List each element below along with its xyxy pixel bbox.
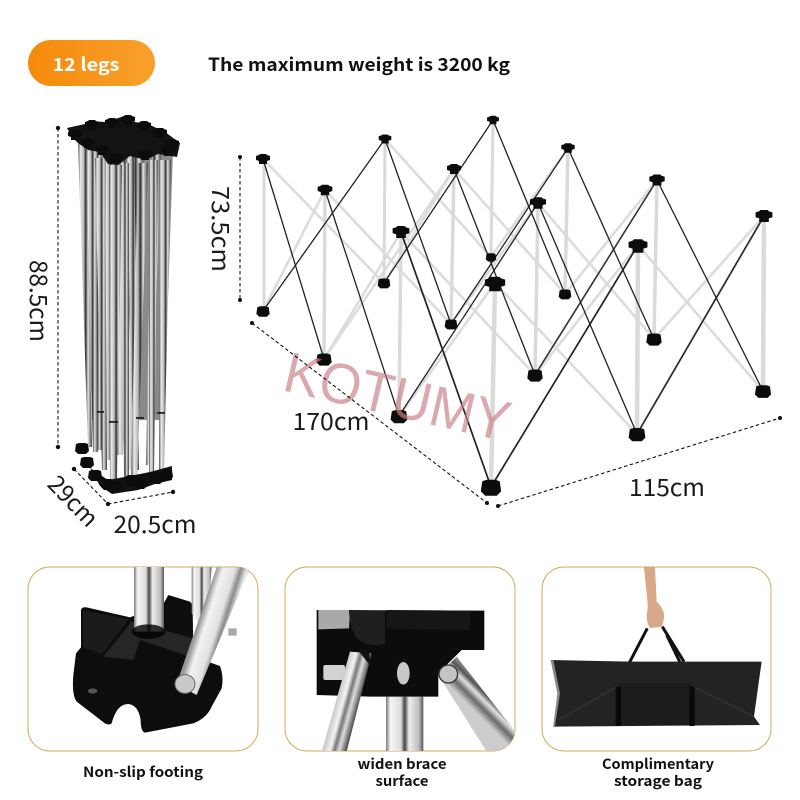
- label: widen brace surface: surface: [376, 771, 428, 791]
- dimension: 88.5cm: [23, 126, 60, 449]
- dimension: 20.5cm: 20.5cm: [114, 505, 196, 540]
- label: complimentary storage bag: [602, 754, 714, 791]
- photo: storage bag held by hand: [551, 567, 762, 727]
- label: complimentary storage bag: storage bag: [614, 771, 703, 791]
- label: Non-slip footing: Non-slip footing: [83, 762, 204, 782]
- vertical legs: [264, 120, 764, 487]
- dimension: 29cm: 29cm: [41, 466, 108, 533]
- dimension: 115cm: 115cm: [629, 468, 705, 503]
- label: widen brace surface: [358, 754, 446, 791]
- dimension: 115cm: [496, 416, 782, 508]
- dimension: 73.5cm: [205, 155, 242, 302]
- panel: widen brace surface: [285, 567, 517, 752]
- badge: 12 legs: 12 legs: [52, 51, 120, 77]
- dimension: 88.5cm: 88.5cm: [23, 260, 58, 342]
- photo: brace head: [317, 610, 517, 752]
- panel: non-slip footing: [28, 567, 258, 751]
- dimension: 73.5cm: 73.5cm: [205, 186, 240, 272]
- dimension: 170cm: [250, 321, 489, 505]
- photo: rubber foot: [73, 567, 250, 733]
- label: complimentary storage bag: Complimentary: [602, 754, 714, 774]
- heading: maximum weight: The maximum weight is 3200 kg: [208, 51, 510, 77]
- label: widen brace surface: widen brace: [358, 754, 446, 774]
- leg caps and feet: [256, 116, 772, 496]
- dimension: 20.5cm: [108, 490, 196, 540]
- panel: complimentary storage bag: [542, 567, 771, 751]
- dimension: 170cm: 170cm: [292, 402, 370, 437]
- badge: 12 legs: [28, 40, 155, 86]
- watermark: KOTUMY: KOTUMY: [278, 340, 517, 454]
- folded frame product photo: [67, 115, 180, 494]
- unfolded frame diagram: [256, 116, 772, 496]
- white scissor braces: [263, 139, 764, 434]
- dark scissor braces: [263, 120, 764, 487]
